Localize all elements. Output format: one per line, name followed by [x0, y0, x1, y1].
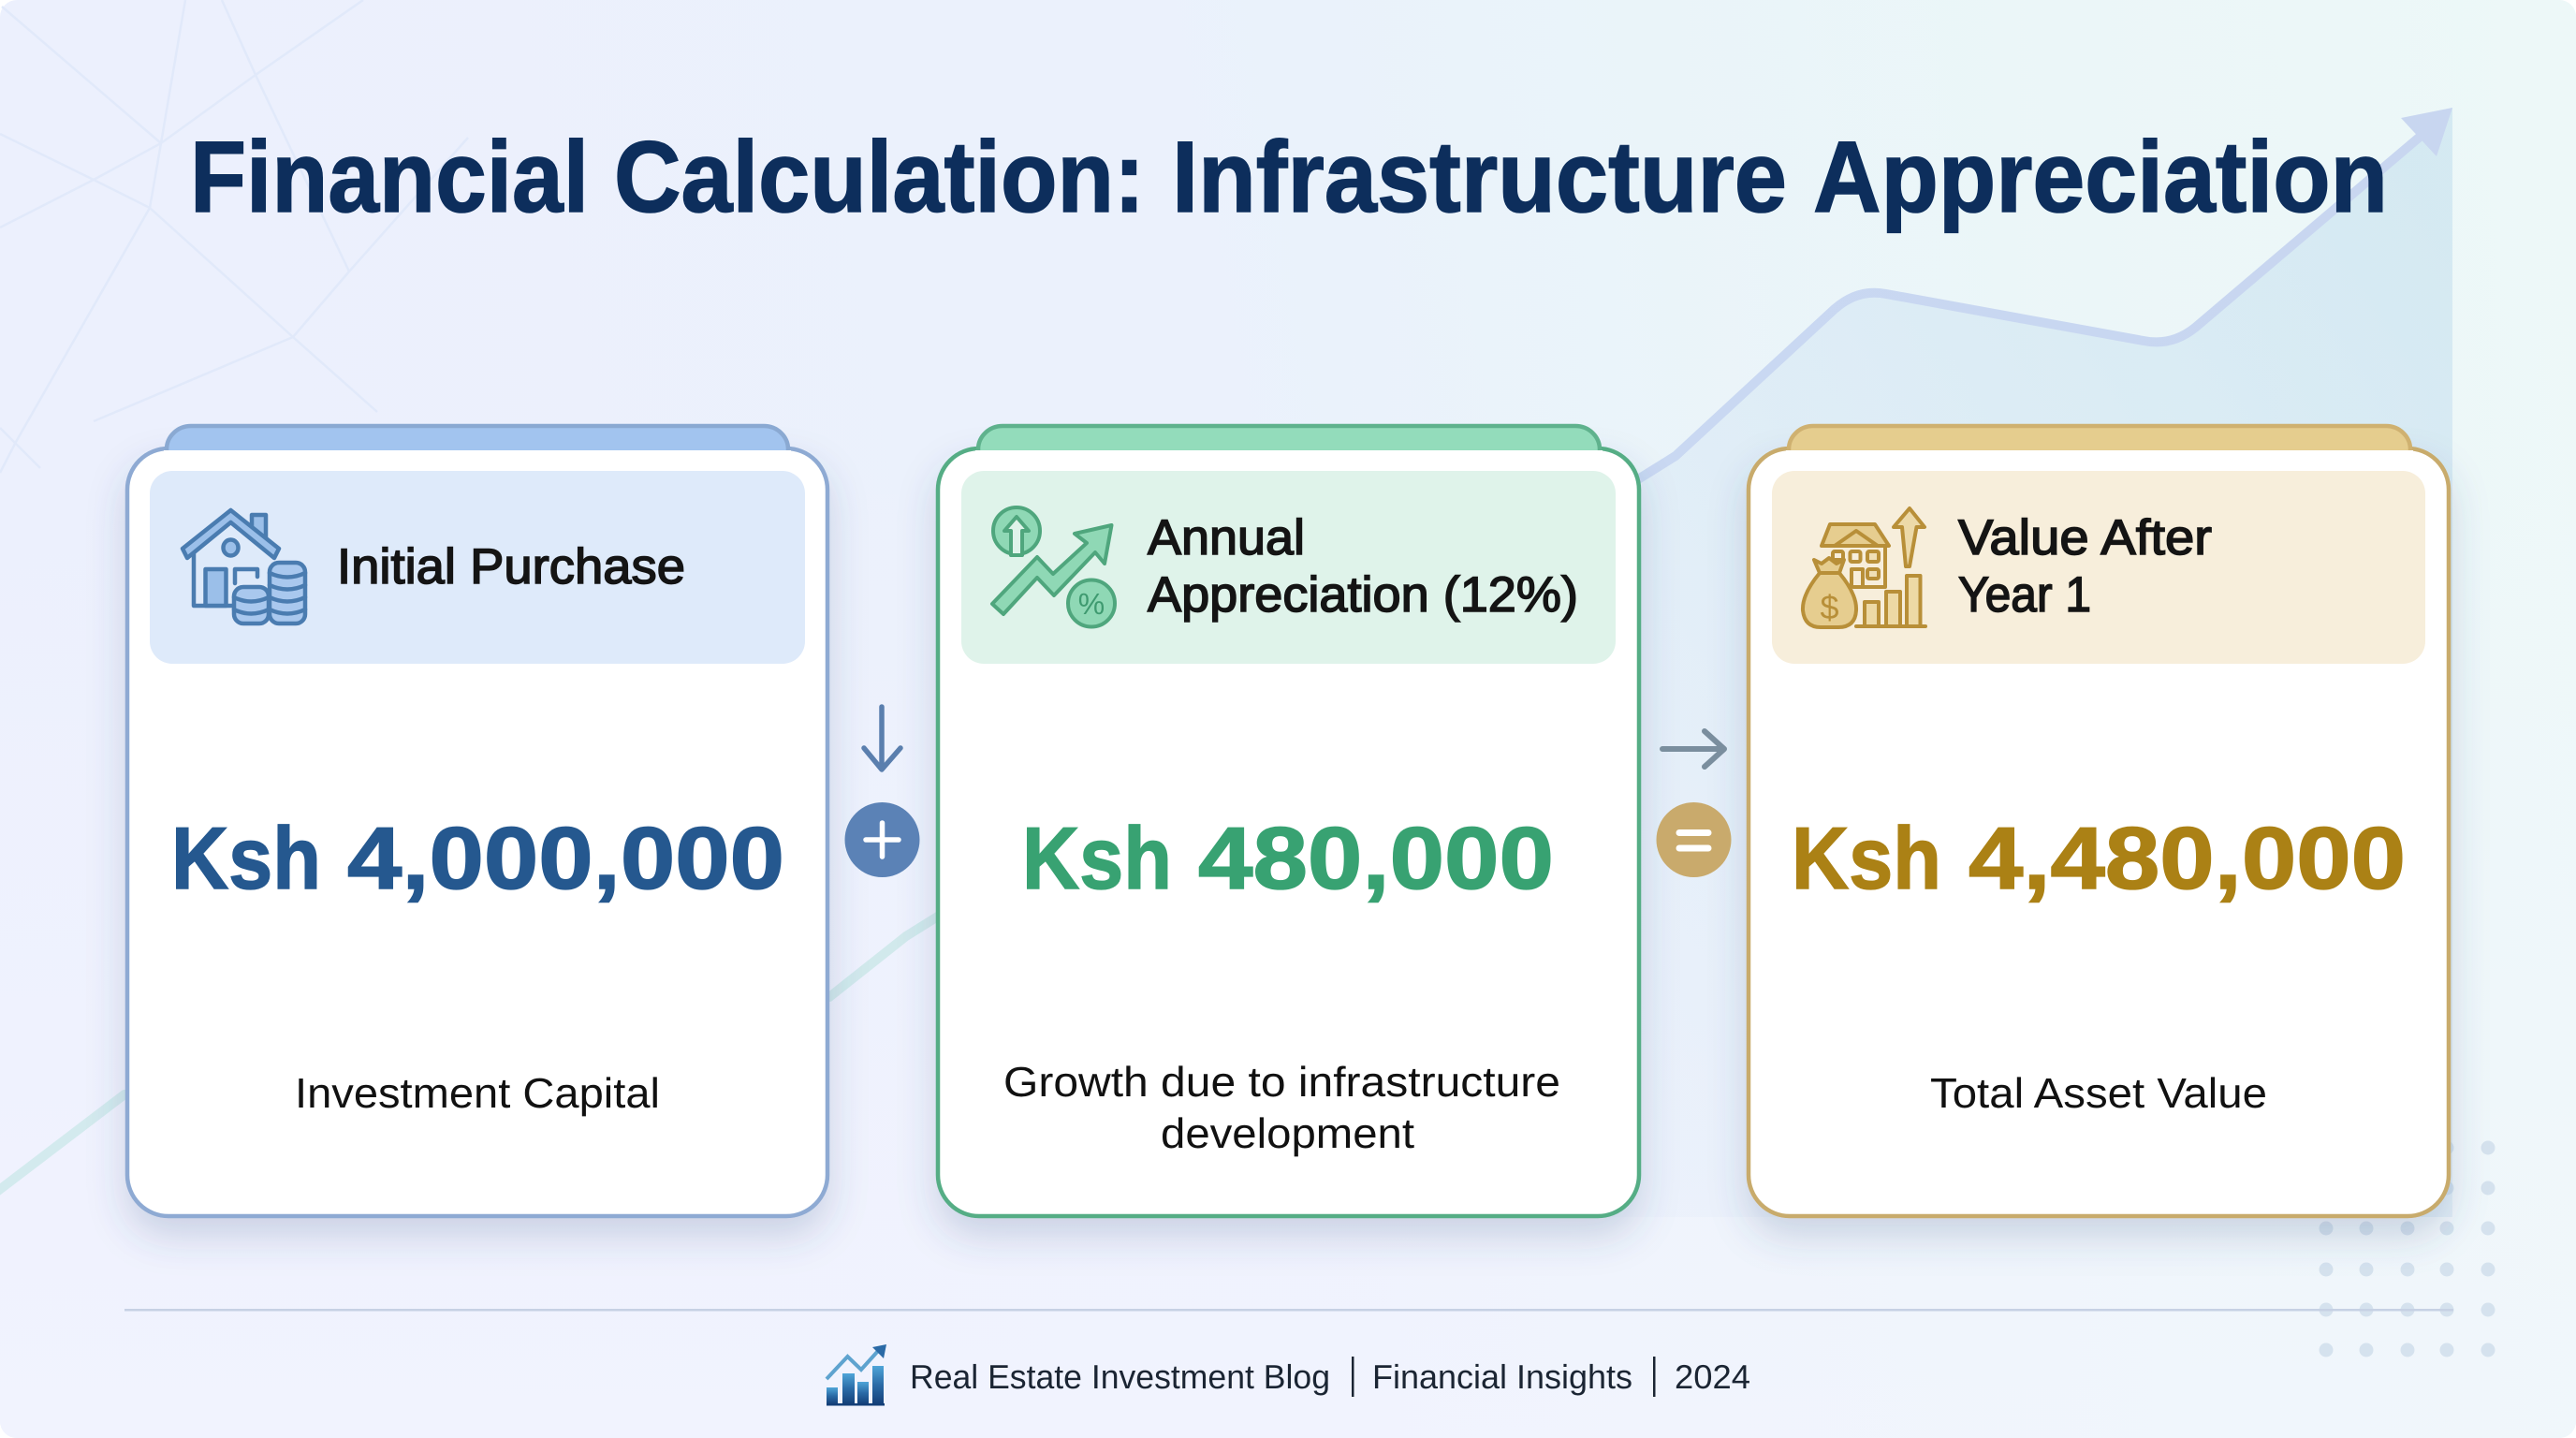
caption: Investment Capital [295, 1069, 660, 1117]
header label line 2: Appreciation (12%) [1148, 567, 1578, 623]
value [171, 809, 784, 907]
header label: Value After [1958, 510, 2212, 565]
icon: house, money bag and bars: $ [1820, 588, 1839, 626]
arrow: right [1662, 731, 1724, 767]
arrow: down [864, 707, 900, 770]
caption: Growth due to infrastructure [1003, 1058, 1560, 1106]
caption: Total Asset Value [1930, 1069, 2267, 1117]
icon: growth arrow with percent [992, 507, 1115, 627]
title: Infrastructure [1172, 120, 1787, 233]
value: 4,480,000 [1969, 809, 2406, 907]
panel: value after year 1 [1749, 426, 2449, 1216]
value [1792, 809, 2406, 907]
icon: equals operator [1657, 802, 1732, 877]
header band [150, 471, 805, 664]
title: Appreciation [1813, 120, 2388, 233]
title [190, 120, 2388, 233]
value [1022, 809, 1554, 907]
caption line 2: development [1161, 1109, 1415, 1157]
panel: initial purchase [127, 426, 827, 1216]
header band [1772, 471, 2425, 664]
value: Ksh [1792, 809, 1941, 907]
header band [961, 471, 1616, 664]
footer text: blog: Real Estate Investment Blog [910, 1357, 1330, 1396]
footer text: insights: Financial Insights [1372, 1357, 1632, 1396]
title: Financial [190, 120, 589, 233]
card tab [1789, 426, 2410, 473]
icon: house, money bag and bars [1803, 508, 1925, 627]
icon: house with coins [183, 510, 305, 624]
value: 480,000 [1198, 809, 1554, 907]
growth trend arrow [0, 108, 2452, 1217]
header label: Initial Purchase [337, 539, 685, 594]
footer divider [124, 1309, 2453, 1311]
footer [827, 1344, 1750, 1406]
value: 4,000,000 [347, 809, 784, 907]
panel: annual appreciation [938, 426, 1639, 1216]
card tab [167, 426, 788, 473]
title: Calculation: [614, 120, 1145, 233]
value: Ksh [1022, 809, 1172, 907]
header label: Annual [1148, 510, 1305, 565]
icon: plus operator [844, 802, 919, 877]
card tab [978, 426, 1600, 473]
background network lines [0, 0, 468, 473]
footer text: year: 2024 [1675, 1357, 1750, 1396]
header label line 2: Year 1 [1958, 567, 2091, 623]
icon: growth arrow with percent: % [1078, 587, 1105, 621]
value: Ksh [171, 809, 321, 907]
dot grid [2320, 1140, 2496, 1357]
icon: footer chart [827, 1344, 886, 1406]
